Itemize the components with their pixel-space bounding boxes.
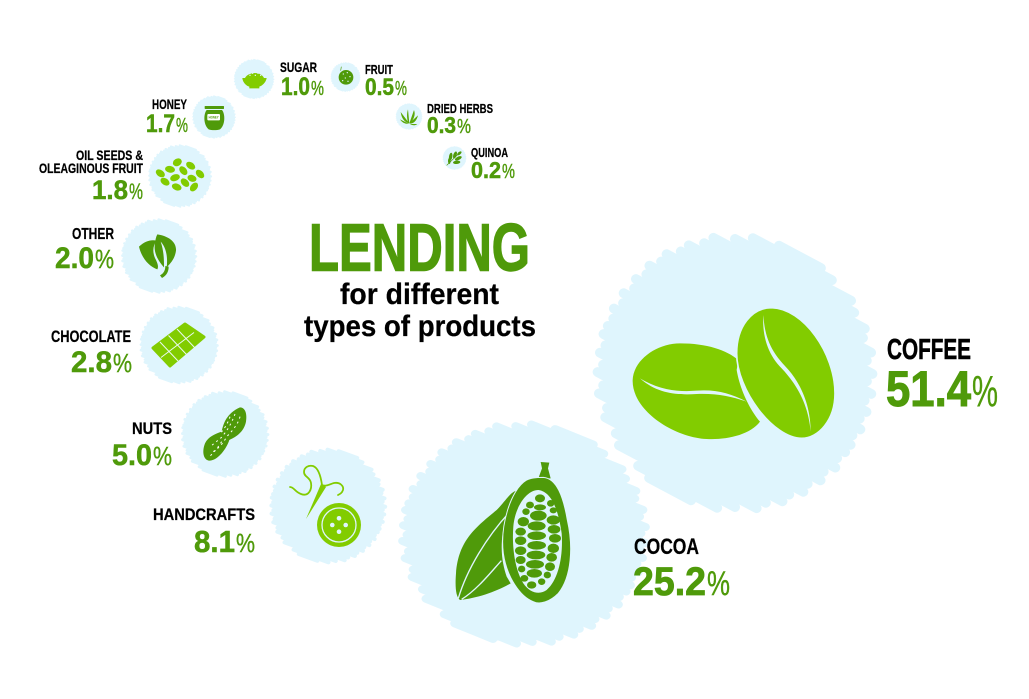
icon: honey jar: HONEY <box>209 115 219 120</box>
blob: quinoa <box>440 144 469 172</box>
label: dried herbs <box>427 101 493 138</box>
label: coffee: 51.4 <box>886 361 971 417</box>
label: sugar <box>280 59 324 101</box>
icon: needle and button <box>290 466 361 547</box>
label: cocoa: % <box>707 565 730 603</box>
label: quinoa: 0.2 <box>471 157 501 183</box>
icon: fruit <box>339 67 353 85</box>
icon: honey jar <box>204 106 224 130</box>
label: cocoa: COCOA <box>634 534 699 559</box>
label: fruit: % <box>395 78 407 100</box>
blob: nuts <box>171 381 279 487</box>
label: handcrafts <box>153 505 255 559</box>
label: oil seeds: OLEAGINOUS FRUIT <box>39 161 144 176</box>
blob: dried herbs <box>393 100 425 133</box>
label: nuts: 5.0 <box>112 439 152 472</box>
icon: dried herbs <box>400 109 418 125</box>
label: cocoa <box>633 534 730 604</box>
label: oil seeds: OIL SEEDS & <box>76 148 143 163</box>
icon: coffee beans <box>633 308 835 439</box>
label: dried herbs: % <box>457 116 471 138</box>
title: for different <box>340 278 499 311</box>
blob: other <box>112 210 206 302</box>
blob: handcrafts <box>256 435 400 577</box>
label: fruit: FRUIT <box>365 63 393 77</box>
label: handcrafts: % <box>236 528 255 558</box>
label: quinoa: % <box>502 161 515 183</box>
label: oil seeds: % <box>129 179 143 204</box>
label: honey: % <box>176 115 188 137</box>
blob: cocoa <box>365 391 683 677</box>
blob: sugar <box>229 54 279 104</box>
label: handcrafts: HANDCRAFTS <box>153 505 255 524</box>
label: other: OTHER <box>72 226 114 243</box>
label: dried herbs: DRIED HERBS <box>427 101 493 116</box>
label: chocolate: % <box>113 348 132 378</box>
label: oil seeds: 1.8 <box>92 175 128 205</box>
label: quinoa: QUINOA <box>471 145 508 160</box>
title <box>304 210 536 343</box>
label: cocoa: 25.2 <box>633 560 706 604</box>
blob: fruit <box>327 59 364 95</box>
label: sugar: 1.0 <box>281 73 310 101</box>
blob: coffee <box>551 191 919 555</box>
title: types of products <box>304 310 536 343</box>
label: chocolate: 2.8 <box>71 346 112 379</box>
icon: cocoa pods <box>456 462 571 603</box>
icon: sugar bowl <box>242 73 267 88</box>
label: honey: 1.7 <box>146 110 175 138</box>
label: nuts <box>112 419 172 472</box>
label: coffee <box>886 334 998 417</box>
label: fruit <box>365 63 407 101</box>
icon: peanut <box>203 407 246 461</box>
blob: honey <box>187 91 241 143</box>
label: nuts: NUTS <box>132 419 172 438</box>
label: chocolate <box>51 327 132 379</box>
icon: oil seeds <box>154 157 206 193</box>
title: LENDING <box>309 210 530 286</box>
icon: leaves <box>139 234 176 278</box>
label: handcrafts: 8.1 <box>194 524 235 559</box>
label: nuts: % <box>153 441 172 471</box>
label: fruit: 0.5 <box>365 74 394 101</box>
label: honey <box>146 97 188 138</box>
label: quinoa <box>471 145 515 183</box>
label: honey: HONEY <box>152 97 187 112</box>
label: other: 2.0 <box>55 242 94 275</box>
label: dried herbs: 0.3 <box>427 112 456 138</box>
icon: quinoa sprig <box>447 151 462 165</box>
label: chocolate: CHOCOLATE <box>51 327 131 346</box>
label: sugar: SUGAR <box>280 59 317 75</box>
label: oil seeds <box>39 148 144 205</box>
icon: chocolate bar <box>153 324 204 366</box>
label: coffee: % <box>972 367 998 416</box>
blob: oil seeds <box>141 137 219 215</box>
label: sugar: % <box>311 78 324 100</box>
blob: chocolate <box>130 297 228 393</box>
label: coffee: COFFEE <box>887 334 971 366</box>
label: other: % <box>95 244 114 274</box>
label: other <box>55 226 114 275</box>
